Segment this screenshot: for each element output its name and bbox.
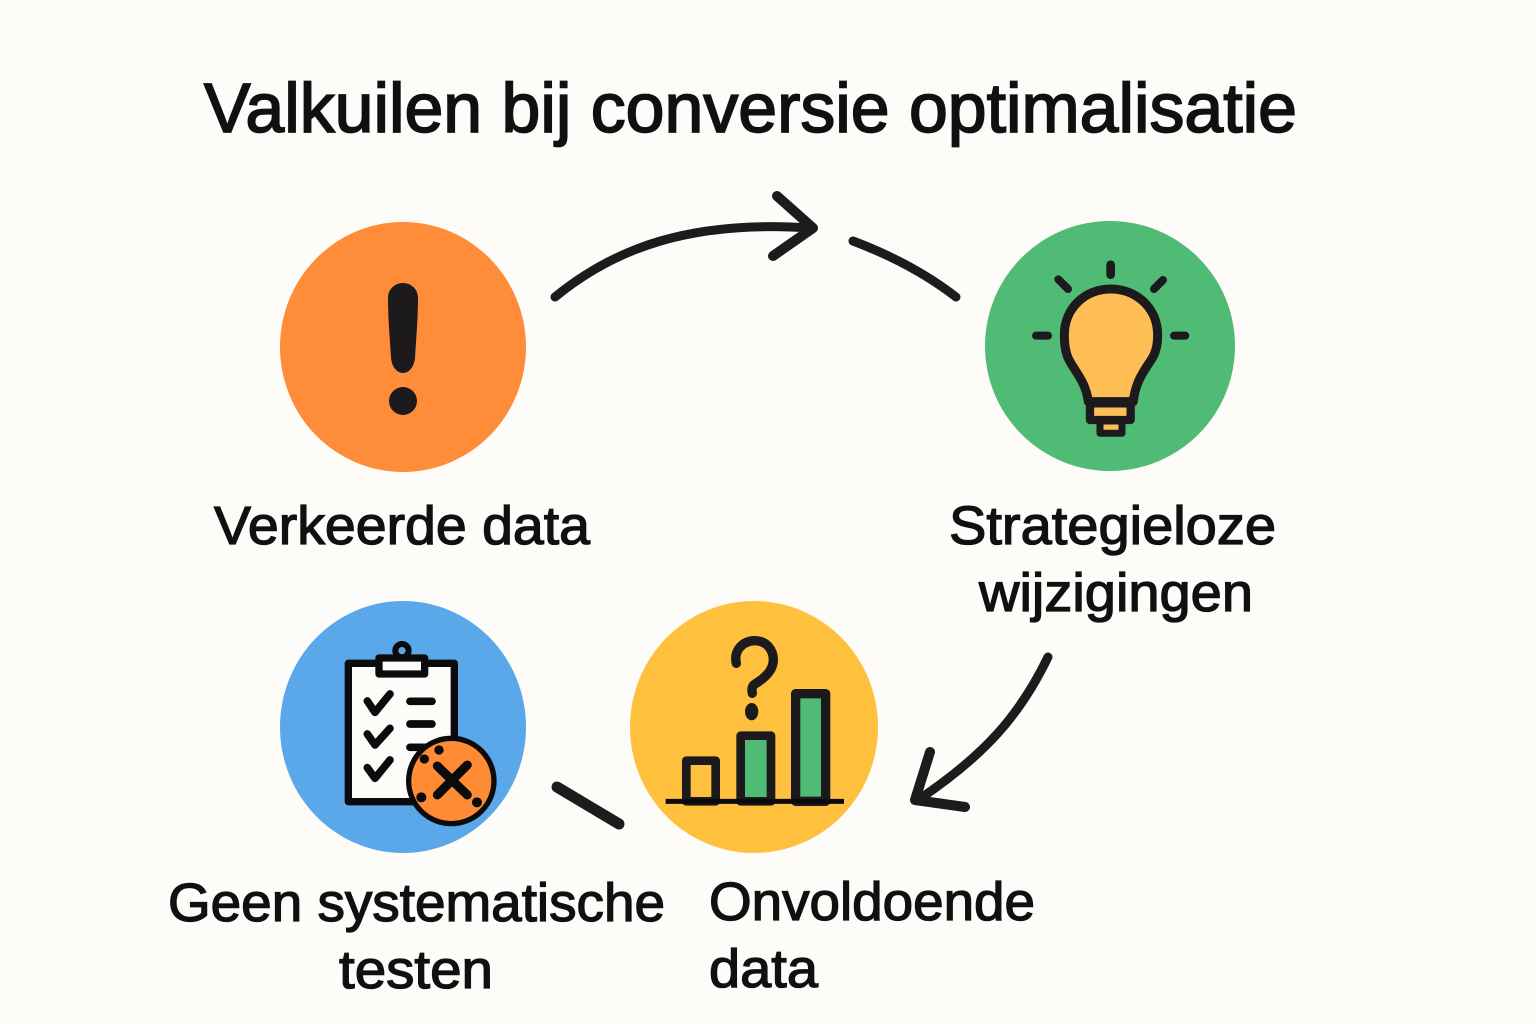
label: onvoldoende data [709, 872, 1035, 999]
icon: bar chart with question mark [666, 641, 844, 801]
label: verkeerde data: Verkeerde data [214, 496, 591, 556]
label: geen systematische testen: testen [339, 940, 493, 1000]
arrow: right curved arrow [915, 657, 1048, 807]
arrow: top curved arrow [555, 196, 813, 297]
arrow: bottom connector line [557, 787, 619, 824]
label: strategieloze wijzigingen [949, 496, 1276, 623]
panel: geen systematische testen [168, 601, 665, 1000]
label: strategieloze wijzigingen: wijzigingen [978, 563, 1253, 623]
circle: orange [280, 222, 526, 472]
label: geen systematische testen [168, 873, 665, 1000]
label: strategieloze wijzigingen: Strategieloze [949, 496, 1276, 556]
circle: green [985, 221, 1235, 471]
icon: light bulb [1036, 265, 1185, 433]
panel: onvoldoende data [630, 601, 1035, 999]
arrow: top right connector line [853, 241, 956, 297]
panel: verkeerde data [214, 222, 591, 556]
label: geen systematische testen: Geen systematische [168, 873, 665, 933]
label: onvoldoende data: Onvoldoende [709, 872, 1035, 932]
panel: strategieloze wijzigingen [949, 221, 1276, 623]
title: Valkuilen bij conversie optimalisatie [204, 69, 1297, 147]
icon: clipboard with cross [348, 644, 494, 824]
label: onvoldoende data: data [709, 939, 819, 999]
circle: blue [280, 601, 526, 853]
circle: yellow [630, 601, 878, 853]
icon: exclamation mark [388, 283, 418, 415]
